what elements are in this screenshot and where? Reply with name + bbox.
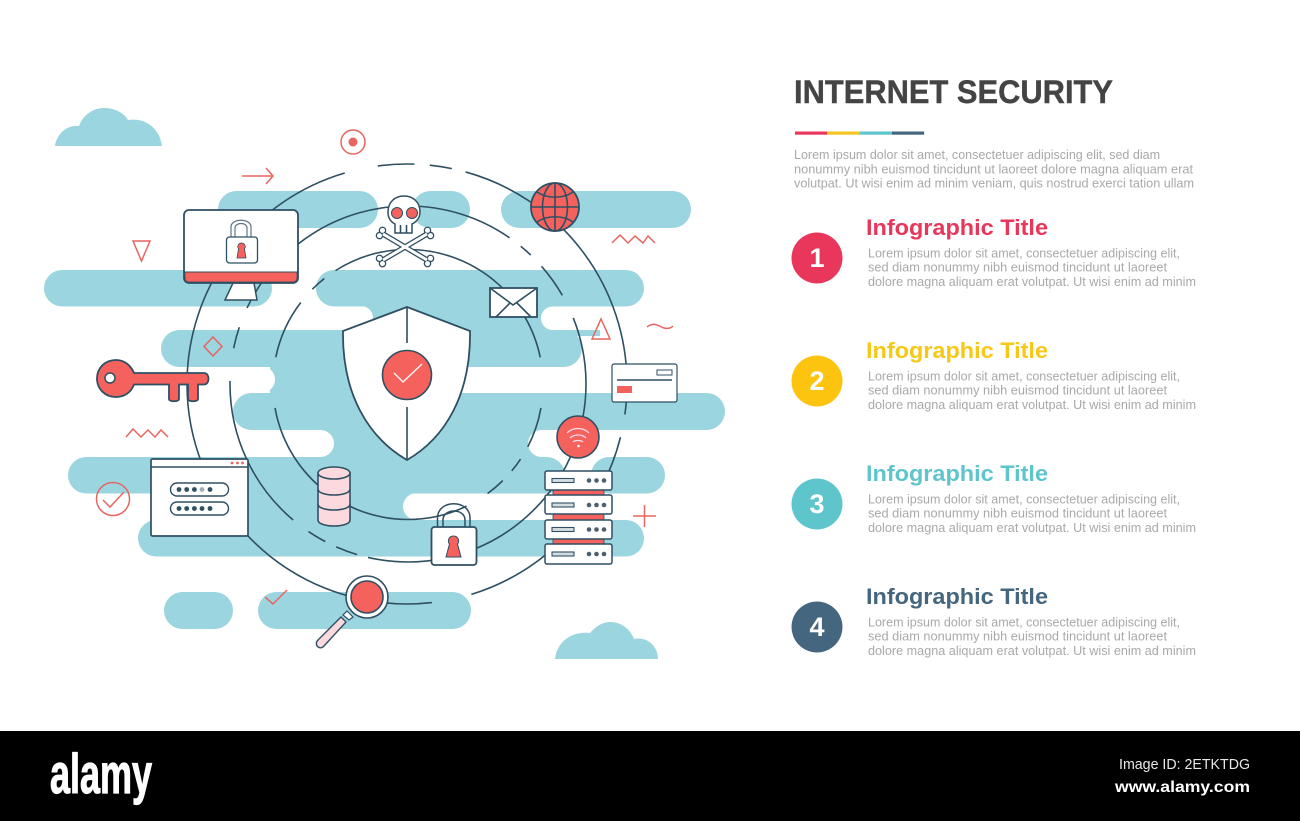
item 4: sed diam nonummy nibh euismod tincidunt ut laoreet (868, 630, 1168, 644)
outer dashed ring (187, 164, 627, 604)
item 1: dolore magna aliquam erat volutpat. Ut wisi enim ad minim (868, 275, 1196, 289)
item 3: sed diam nonummy nibh euismod tincidunt ut laoreet (868, 506, 1168, 520)
title: INTERNET SECURITY (794, 74, 1113, 110)
intro paragraph (794, 148, 1194, 190)
icon: monitor with lock (184, 210, 298, 300)
item 4 (792, 584, 1196, 658)
small red decorations (96, 130, 673, 604)
item 2: Infographic Title (866, 338, 1048, 363)
item 1: Lorem ipsum dolor sit amet, consectetuer adipiscing elit, (868, 246, 1180, 260)
item 3: 3 (809, 489, 825, 519)
middle dashed ring (230, 206, 586, 562)
icon: shield with check (343, 307, 470, 460)
item 1: Infographic Title (866, 215, 1048, 240)
item 3: Lorem ipsum dolor sit amet, consectetuer adipiscing elit, (868, 492, 1180, 506)
background: teal rounded bands (44, 191, 725, 629)
item 2: sed diam nonummy nibh euismod tincidunt ut laoreet (868, 384, 1168, 398)
icon: database cylinder (318, 467, 350, 526)
item 3: dolore magna aliquam erat volutpat. Ut wisi enim ad minim (868, 521, 1196, 535)
footer bar: Image ID: 2ETKTDG (1119, 757, 1250, 773)
colour rule (795, 132, 924, 135)
intro paragraph: Lorem ipsum dolor sit amet, consectetuer adipiscing elit, sed diam (794, 148, 1160, 162)
item 3: Infographic Title (866, 461, 1048, 486)
cloud top left (55, 108, 162, 146)
cloud bottom right (555, 622, 658, 659)
icon: password window (151, 459, 248, 536)
icon: key (97, 360, 208, 401)
item 4: Infographic Title (866, 584, 1048, 609)
footer bar: alamy (50, 742, 152, 805)
icon: credit card (612, 364, 677, 402)
footer bar (0, 731, 1300, 821)
item 4: Lorem ipsum dolor sit amet, consectetuer adipiscing elit, (868, 616, 1180, 630)
item 4: dolore magna aliquam erat volutpat. Ut wisi enim ad minim (868, 644, 1196, 658)
item 2: dolore magna aliquam erat volutpat. Ut wisi enim ad minim (868, 398, 1196, 412)
item 4: 4 (809, 612, 825, 642)
item 1 (792, 215, 1196, 289)
inner dashed ring (273, 250, 543, 520)
icon: envelope (490, 288, 537, 317)
icon: padlock (432, 504, 476, 565)
icon: skull and crossbones (376, 196, 434, 267)
icon: globe (531, 183, 579, 231)
item 2 (792, 338, 1196, 412)
item 2: Lorem ipsum dolor sit amet, consectetuer adipiscing elit, (868, 370, 1180, 384)
intro paragraph: volutpat. Ut wisi enim ad minim veniam, quis nostrud exerci tation ullam (794, 176, 1194, 190)
item 2: 2 (809, 366, 825, 396)
icon: server rack (545, 471, 612, 564)
item 1: sed diam nonummy nibh euismod tincidunt ut laoreet (868, 260, 1168, 274)
item 3 (792, 461, 1196, 535)
icon: magnifying glass (316, 576, 388, 648)
intro paragraph: nonummy nibh euismod tincidunt ut laoreet dolore magna aliquam erat (794, 162, 1194, 176)
icon: wifi (557, 416, 599, 458)
item 1: 1 (809, 243, 825, 273)
footer bar: www.alamy.com (1114, 779, 1250, 796)
